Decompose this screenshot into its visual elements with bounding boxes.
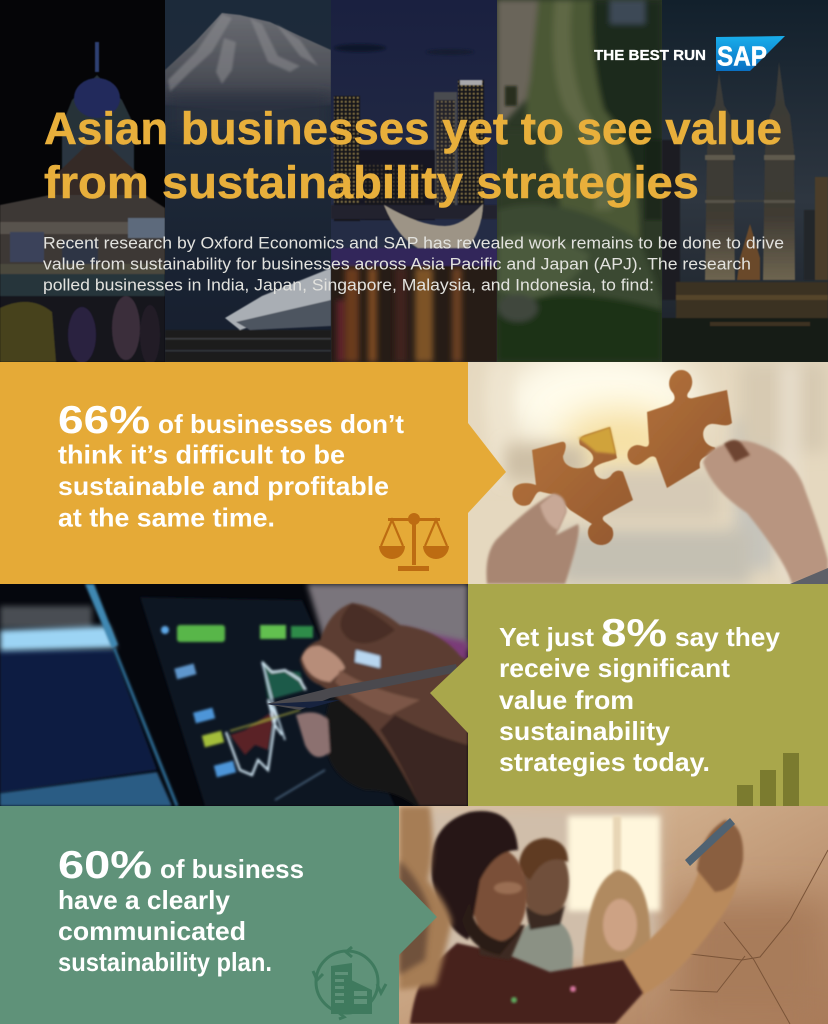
photo strip: Mount Fuji <box>165 0 331 362</box>
foreground blurred hand <box>399 806 452 990</box>
stat text: sustainability plan. <box>58 947 272 977</box>
logo: The Best Run SAP <box>594 36 785 72</box>
left puzzle piece <box>512 427 633 545</box>
icon: sustainable building <box>313 947 386 1019</box>
stat text: 66% <box>58 399 150 442</box>
photo: team drawing on a wall <box>399 806 828 1024</box>
stat text: of businesses don’t <box>158 409 404 439</box>
second man <box>510 836 574 973</box>
icon: bar chart <box>737 753 799 806</box>
header photo collage <box>0 0 828 365</box>
panel: 8% callout <box>430 584 828 806</box>
arm and body of main figure <box>623 867 740 995</box>
photo strip: Mumbai station <box>0 0 165 365</box>
background <box>307 584 468 650</box>
photo: hand with stylus on stock chart tablet <box>0 584 468 806</box>
stat text: sustainability <box>499 716 671 746</box>
icon: scales <box>379 513 449 571</box>
stat text: sustainable and profitable <box>58 471 389 501</box>
stat text: have a clearly <box>58 885 231 915</box>
window <box>568 816 660 911</box>
stat text <box>499 612 781 777</box>
stat text: 60% <box>58 844 152 887</box>
stat text: of business <box>160 854 304 884</box>
chart <box>161 625 325 800</box>
photo strip: Petronas towers <box>662 0 828 362</box>
woman <box>582 868 652 968</box>
photo: hands joining puzzle pieces <box>468 345 828 584</box>
stat text <box>58 844 304 977</box>
intro text: Recent research by Oxford Economics and SAP has revealed work remains to be done to drive <box>43 234 784 252</box>
logo: The Best Run SAP: THE BEST RUN <box>594 47 706 64</box>
intro text: value from sustainability for businesses across Asia Pacific and Japan (APJ). The research <box>43 256 751 274</box>
panel: 60% callout <box>0 806 437 1024</box>
stat text <box>58 399 404 532</box>
stat text: Yet just <box>499 622 594 652</box>
stat text: 8% <box>601 612 667 655</box>
monitor <box>0 650 157 793</box>
photo strip: rice terraces <box>497 0 662 362</box>
icon: SAP logo: SAP <box>717 40 767 72</box>
intro text <box>43 234 784 294</box>
tablet screen <box>140 597 395 806</box>
wall chart lines <box>670 850 828 1024</box>
stylus <box>266 664 458 710</box>
photo strip: Singapore skyline <box>331 0 497 362</box>
stat text: receive significant <box>499 653 730 683</box>
stat text: strategies today. <box>499 747 710 777</box>
stat text: communicated <box>58 916 246 946</box>
title: from sustainability strategies <box>44 157 699 208</box>
right hand <box>703 441 828 584</box>
main figure head <box>431 811 527 960</box>
stat text: think it’s difficult to be <box>58 440 345 470</box>
hand <box>296 603 468 806</box>
stat text: say they <box>675 622 781 652</box>
stat text: at the same time. <box>58 502 275 532</box>
left hand <box>486 494 579 584</box>
stat text: value from <box>499 685 634 715</box>
right puzzle piece <box>628 370 732 488</box>
title <box>44 103 782 208</box>
panel: 66% callout <box>0 362 506 584</box>
title: Asian businesses yet to see value <box>44 103 782 154</box>
intro text: polled businesses in India, Japan, Singapore, Malaysia, and Indonesia, to find: <box>43 276 654 294</box>
